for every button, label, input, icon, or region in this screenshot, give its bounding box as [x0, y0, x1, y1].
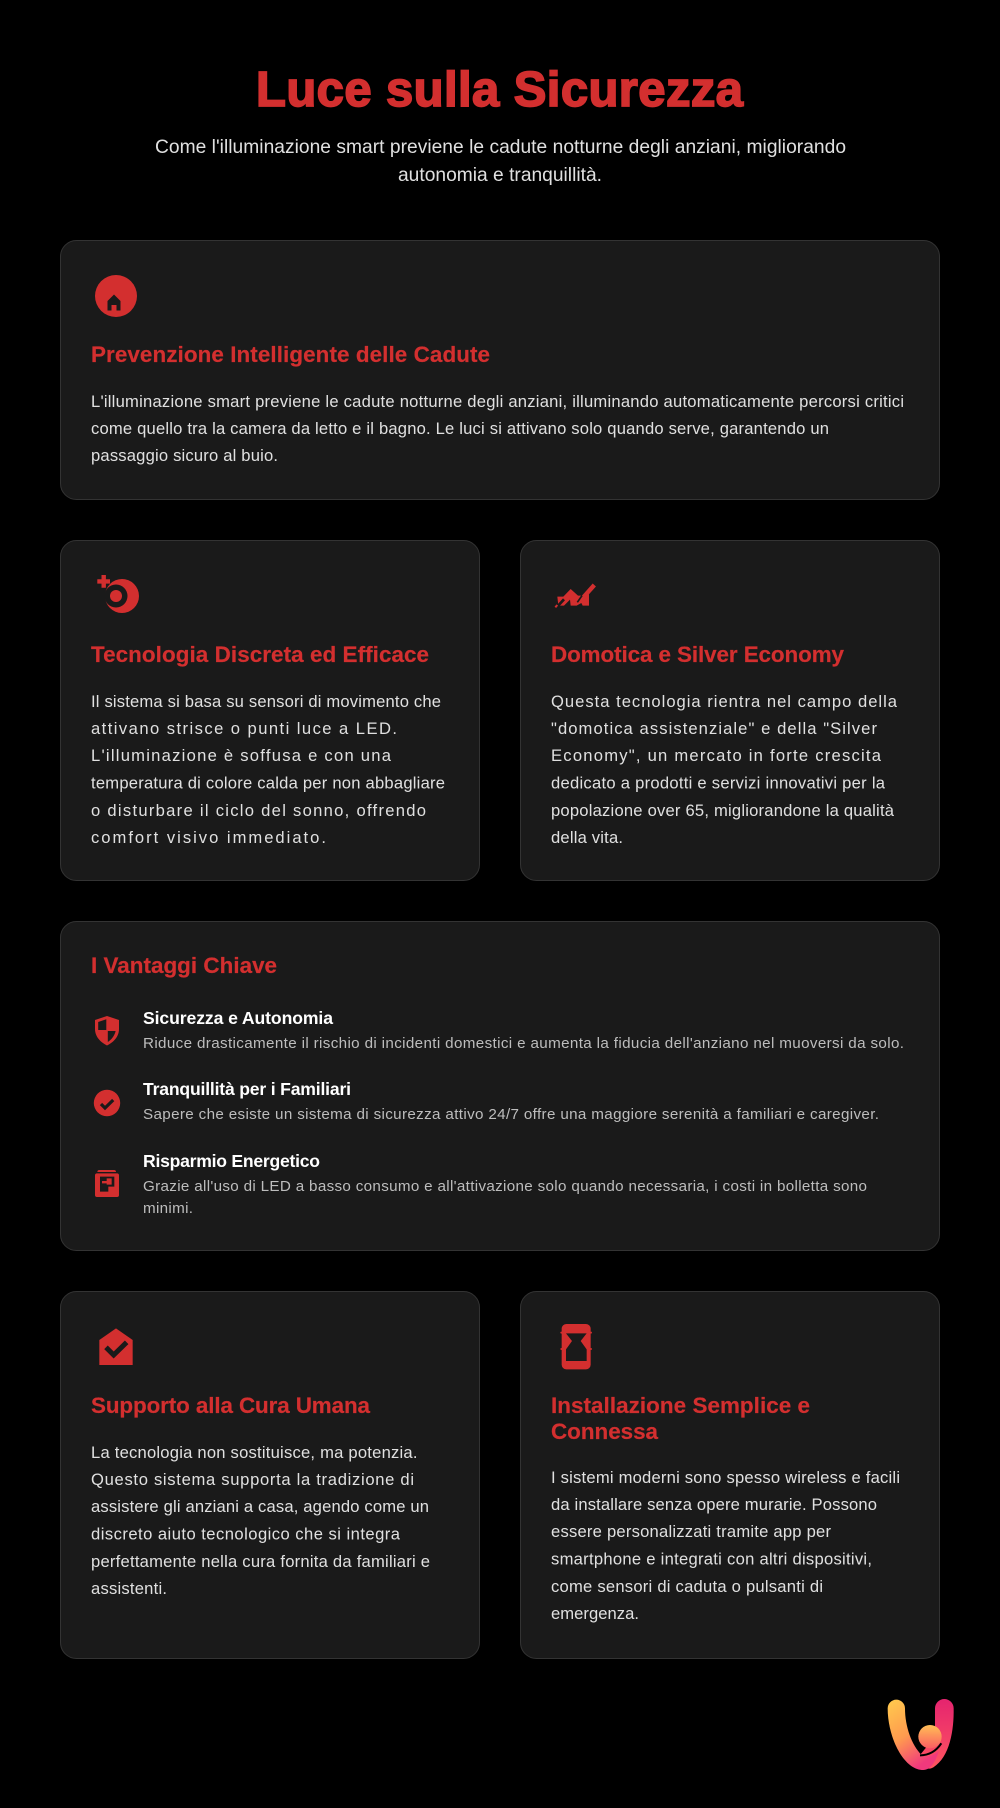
text block: supporto: La tecnologia non sostituisce, ma potenzia.: [91, 1443, 418, 1462]
item: sicurezza e autonomia: [95, 1008, 904, 1052]
subtitle: Come l'illuminazione smart previene le cadute notturne degli anziani, migliorando: [155, 137, 846, 158]
heading: vantaggi: I Vantaggi Chiave: [91, 953, 277, 978]
subtitle: autonomia e tranquillità.: [398, 165, 602, 186]
text block: supporto: Questo sistema supporta la tradizione di: [91, 1470, 414, 1489]
panel: i vantaggi chiave: [60, 922, 940, 1250]
item title: risparmio: Risparmio Energetico: [143, 1151, 320, 1171]
icon: rising chart: [555, 585, 594, 607]
text block: tecnologia: [91, 692, 445, 847]
heading: tecnologia: Tecnologia Discreta ed Efficace: [91, 642, 429, 667]
text block: supporto: perfettamente nella cura fornita da familiari e: [91, 1552, 430, 1571]
text block: supporto: [91, 1443, 430, 1598]
text block: prevenzione: [91, 392, 904, 465]
icon: target with plus: [97, 575, 139, 613]
text block: prevenzione: come quello tra la camera da letto e il bagno. Le luci si attivano solo quando serve, garantendo un: [91, 419, 829, 438]
text block: domotica: dedicato a prodotti e servizi innovativi per la: [551, 774, 886, 792]
item title: sicurezza: Sicurezza e Autonomia: [143, 1008, 333, 1028]
text block: installazione: da installare senza opere murarie. Possono: [551, 1495, 877, 1514]
item text: tranquillità: Sapere che esiste un sistema di sicurezza attivo 24/7 offre una maggiore serenità a familiari e caregiver.: [143, 1106, 879, 1123]
text block: tecnologia: comfort visivo immediato.: [91, 828, 326, 847]
text block: installazione: I sistemi moderni sono spesso wireless e facili: [551, 1468, 900, 1487]
text block: tecnologia: Il sistema si basa su sensori di movimento che: [91, 692, 441, 711]
text block: domotica: Economy", un mercato in forte crescita: [551, 746, 882, 765]
text block: installazione: come sensori di caduta o pulsanti di: [551, 1577, 823, 1596]
heading: supporto: Supporto alla Cura Umana: [91, 1393, 371, 1418]
icon: smartphone: [560, 1324, 592, 1369]
panel: supporto alla cura umana: [60, 1292, 480, 1658]
text block: supporto: assistenti.: [91, 1579, 167, 1598]
text block: domotica: Questa tecnologia rientra nel campo della: [551, 692, 898, 711]
icon: house envelope with check: [99, 1328, 133, 1365]
panel: prevenzione intelligente: [60, 240, 940, 500]
text block: domotica: della vita.: [551, 828, 623, 847]
icon: energy box: [95, 1170, 119, 1197]
heading: domotica: Domotica e Silver Economy: [551, 642, 845, 667]
icon: check circle: [94, 1090, 120, 1116]
text block: supporto: assistere gli anziani a casa, agendo come un: [91, 1497, 429, 1516]
item text: sicurezza: Riduce drasticamente il rischio di incidenti domestici e aumenta la fiducia dell'anziano nel muoversi da solo.: [143, 1035, 904, 1052]
panel: installazione semplice: [520, 1292, 940, 1658]
icon: shield: [95, 1016, 119, 1046]
item: tranquillità per i familiari: [94, 1079, 879, 1123]
panel: domotica e silver economy: [520, 540, 940, 880]
text block: domotica: [551, 692, 898, 847]
heading: installazione: Connessa: [551, 1419, 659, 1444]
text block: installazione: emergenza.: [551, 1604, 639, 1623]
heading: prevenzione: Prevenzione Intelligente delle Cadute: [91, 342, 490, 367]
text block: supporto: discreto aiuto tecnologico che si integra: [91, 1524, 401, 1544]
text block: installazione: [551, 1468, 900, 1623]
text block: tecnologia: temperatura di colore calda per non abbagliare: [91, 774, 445, 792]
icon: house in circle: [95, 275, 137, 317]
text block: installazione: essere personalizzati tramite app per: [551, 1522, 831, 1541]
item text: risparmio: [143, 1178, 867, 1217]
heading: installazione: [551, 1393, 810, 1444]
text block: domotica: popolazione over 65, migliorandone la qualità: [551, 801, 895, 820]
text block: installazione: smartphone e integrati con altri dispositivi,: [551, 1550, 872, 1568]
text block: tecnologia: attivano strisce o punti luce a LED.: [91, 719, 397, 738]
item title: tranquillità: Tranquillità per i Familiari: [143, 1079, 351, 1099]
panel: tecnologia discreta: [60, 540, 480, 880]
title: Luce sulla Sicurezza: [256, 63, 744, 117]
item: risparmio energetico: [95, 1151, 867, 1217]
subtitle: [155, 137, 846, 186]
text block: tecnologia: L'illuminazione è soffusa e con una: [91, 746, 392, 765]
text block: prevenzione: passaggio sicuro al buio.: [91, 446, 278, 465]
item text: risparmio: minimi.: [143, 1200, 193, 1217]
logo: [888, 1699, 954, 1770]
text block: domotica: "domotica assistenziale" e della "Silver: [551, 719, 877, 738]
heading: installazione: Installazione Semplice e: [551, 1393, 810, 1418]
text block: tecnologia: o disturbare il ciclo del sonno, offrendo: [91, 801, 426, 820]
item text: risparmio: Grazie all'uso di LED a basso consumo e all'attivazione solo quando necessaria, i costi in bolletta sono: [143, 1178, 867, 1195]
text block: prevenzione: L'illuminazione smart previene le cadute notturne degli anziani, illuminando automaticamente percorsi critici: [91, 392, 904, 411]
